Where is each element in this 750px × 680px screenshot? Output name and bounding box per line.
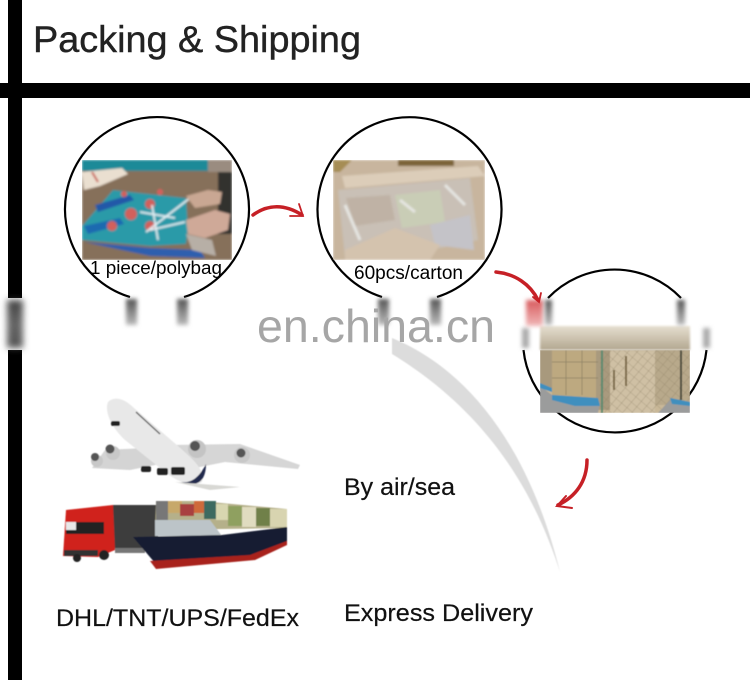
arrow: polybag to carton [253,204,303,216]
arrow: pallets to delivery [557,460,587,508]
circle outline 3 [548,270,681,298]
label: DHL/TNT/UPS/FedEx: DHL/TNT/UPS/FedEx [56,605,299,632]
title: Packing & Shipping [33,19,361,60]
photo: pallets [540,350,690,413]
illustration: plane, truck and ship [63,399,300,569]
blurred circle-stroke smears [126,299,441,325]
watermark: en.china.cn [257,300,495,352]
blurred band [522,300,710,350]
panel: pallets step [522,270,710,432]
header rule [0,83,750,98]
label: Express Delivery: Express Delivery [344,600,533,627]
photo: polybag [82,160,232,260]
plane [91,399,300,490]
left vertical bar [7,0,23,680]
circle outline 2 [317,117,502,297]
background swoosh [392,338,560,572]
panel: polybag step [65,117,249,297]
truck [63,505,158,562]
photo: carton [333,160,485,260]
circle outline 1 [65,117,249,297]
panel: carton step [317,117,502,297]
arrow: carton to pallets [496,272,541,302]
label: 60pcs/carton: 60pcs/carton [354,263,463,284]
label: By air/sea: By air/sea [344,474,456,501]
ship [133,501,287,569]
label: 1 piece/polybag: 1 piece/polybag [90,257,222,278]
